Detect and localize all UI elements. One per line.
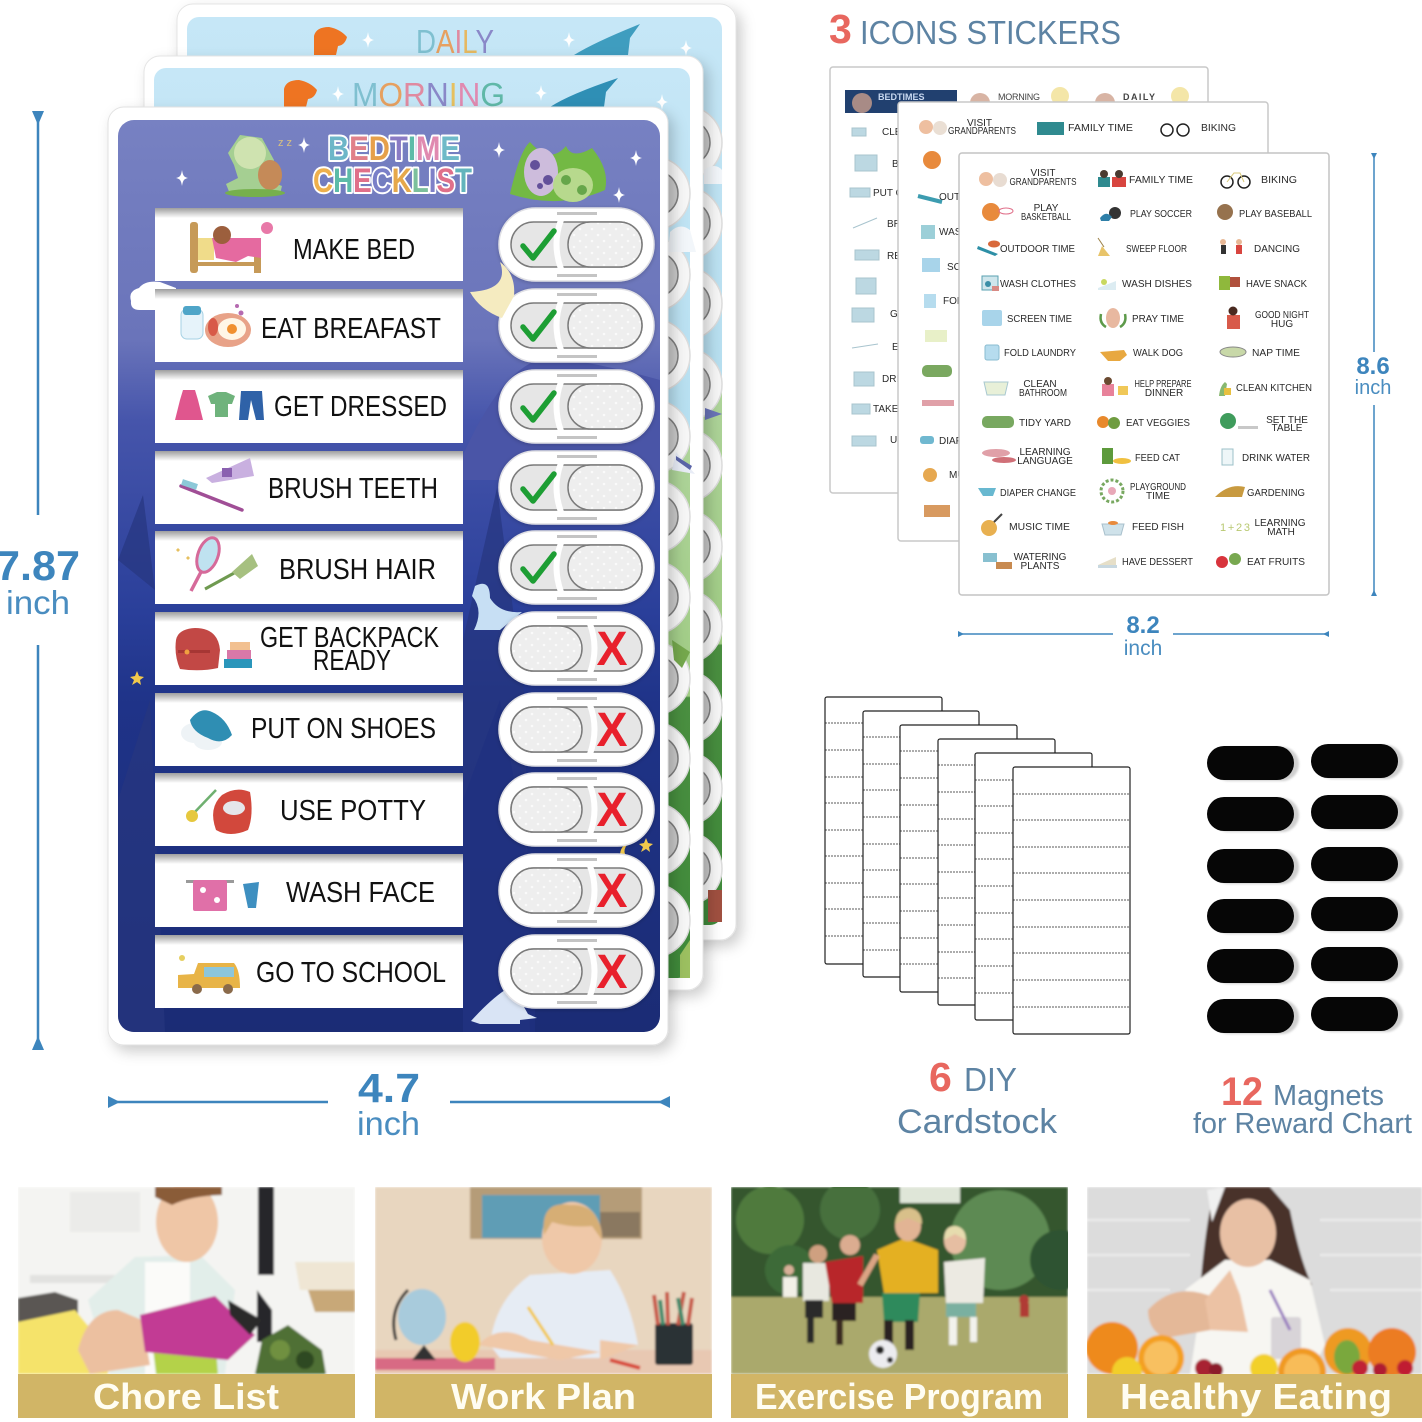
heading: 3 icons stickers: [829, 6, 1121, 52]
sticker: sweep floor: [1098, 238, 1187, 256]
toggle: checked 2: [499, 289, 654, 362]
sticker: set the table: TABLE: [1272, 423, 1303, 434]
sticker: play soccer: PLAY SOCCER: [1130, 209, 1192, 220]
sticker: wash clothes: [982, 276, 1076, 291]
dimension: sticker height 8.6 inch: [1355, 153, 1391, 596]
sticker: play basketball: BASKETBALL: [1021, 212, 1071, 223]
photo panel: exercise program: [731, 1180, 1090, 1418]
toggle: checked 1: [499, 208, 654, 281]
sticker: watering plants: WATERING: [1014, 552, 1067, 563]
icon: potty and brush: [186, 790, 252, 834]
sticker: clean bathroom: CLEAN: [1023, 379, 1057, 390]
photo: children playing soccer: [731, 1180, 1090, 1374]
panel: bedtime sticker sheet: BEDTIMES: [878, 92, 925, 102]
sticker: walk dog: [1100, 348, 1183, 361]
sticker: fold laundry: [985, 345, 1076, 360]
sticker: playground time: TIME: [1146, 491, 1170, 502]
sticker: feed fish: [1102, 521, 1184, 535]
panel: daily checklist board: [177, 4, 736, 940]
card 3: [900, 725, 1017, 992]
sticker: nap time: [1220, 347, 1300, 359]
panel: bedtime sticker sheet: USE: [890, 435, 911, 446]
row: backpack: READY: [313, 645, 391, 677]
sticker: learning language: LEARNING: [1019, 447, 1071, 458]
label: 12 magnets for reward chart: [1193, 1070, 1412, 1140]
icon: orange dino: [314, 27, 347, 55]
panel: main sticker sheet: [959, 153, 1329, 595]
sticker: eat fruits: EAT FRUITS: [1247, 557, 1305, 568]
panel: family sticker sheet: SCREEN: [947, 262, 989, 273]
icon: toothbrush and toothpaste: [181, 458, 254, 510]
toggle: checked 5: [499, 531, 654, 604]
sticker: drink water: DRINK WATER: [1242, 453, 1310, 464]
sticker: dancing: [1220, 239, 1300, 255]
icon: sleeping triceratops: [225, 135, 292, 197]
sticker: learning language: LANGUAGE: [1017, 456, 1073, 467]
row: get dressed: GET DRESSED: [274, 391, 447, 423]
label: 12 magnets for reward chart: 12: [1221, 1070, 1263, 1114]
sticker: learning math: LEARNING: [1254, 518, 1306, 529]
sticker: learning math: 1+23: [1220, 522, 1250, 534]
sticker: visit grandparents: [979, 168, 1077, 188]
sticker: biking: BIKING: [1261, 175, 1297, 186]
sticker: good night hug: [1227, 306, 1309, 330]
row: backpack: [155, 612, 463, 685]
sticker: clean kitchen: [1219, 382, 1312, 396]
dimension: width 4.7 inch: inch: [357, 1105, 420, 1142]
icon: dino eggs and leaves: [510, 142, 606, 202]
panel: family sticker sheet: WASH: [939, 227, 969, 238]
sticker: tidy yard: [982, 416, 1071, 429]
sticker: wash clothes: WASH CLOTHES: [1000, 279, 1076, 290]
sticker: fold laundry: FOLD LAUNDRY: [1004, 348, 1076, 359]
sticker: feed cat: [1102, 448, 1180, 464]
card 4: [938, 739, 1055, 1005]
dimension: sticker height 8.6 inch: 8.6: [1356, 353, 1390, 380]
icon: school bus: [178, 955, 240, 994]
dimension: height 7.87 inch: [0, 111, 80, 1050]
row: get dressed: [155, 370, 463, 443]
sticker: eat veggies: [1097, 416, 1190, 429]
dimension: width 4.7 inch: 4.7: [358, 1065, 420, 1111]
sticker: feed cat: FEED CAT: [1135, 453, 1180, 464]
photo panel: chore list: [18, 1182, 355, 1418]
heading: 3 icons stickers: 3: [829, 6, 852, 52]
row: eat breakfast: [155, 289, 463, 362]
panel: family sticker sheet: [898, 102, 1268, 541]
photo panel: work plan: [375, 1187, 712, 1418]
sticker: diaper change: DIAPER CHANGE: [1000, 488, 1076, 499]
icon: sleeping triceratops: z z: [278, 137, 292, 149]
icon: blue pterosaur: [574, 24, 640, 55]
sticker: help prepare dinner: DINNER: [1145, 388, 1183, 399]
sticker: screen time: SCREEN TIME: [1007, 314, 1072, 325]
card 6: [1013, 767, 1130, 1034]
sticker: eat veggies: EAT VEGGIES: [1126, 418, 1190, 429]
card 5: [975, 753, 1092, 1020]
card 1: [825, 697, 942, 964]
row: eat breakfast: EAT BREAFAST: [261, 313, 441, 345]
sticker: learning math: MATH: [1267, 527, 1295, 538]
label: 6 diy cardstock: [897, 1054, 1058, 1141]
toggle: checked 3: [499, 370, 654, 443]
sticker: visit grandparents: VISIT: [1030, 168, 1056, 179]
icon: mirror and comb: [176, 535, 258, 591]
panel: family sticker sheet: OUTDOOR: [939, 192, 990, 203]
heading: 3 icons stickers: ICONS STICKERS: [860, 14, 1121, 51]
decoration: crescent moon: [470, 262, 514, 318]
sticker: screen time: [982, 310, 1072, 326]
card 2: [863, 711, 979, 977]
sticker: eat fruits: [1216, 553, 1305, 568]
panel: bedtime sticker sheet: GO: [890, 309, 906, 320]
dimension: sticker width 8.2 inch: inch: [1124, 637, 1162, 660]
sticker: watering plants: [983, 552, 1067, 572]
label: 6 diy cardstock: Cardstock: [897, 1103, 1058, 1141]
sticker: clean kitchen: CLEAN KITCHEN: [1236, 383, 1312, 394]
photo: girl with fruit: [1087, 1187, 1422, 1374]
sticker: pray time: PRAY TIME: [1132, 314, 1184, 325]
sticker: help prepare dinner: [1102, 377, 1192, 399]
label: 12 magnets for reward chart: Magnets: [1273, 1080, 1384, 1112]
panel: bedtime sticker sheet: READ: [887, 251, 915, 262]
sticker: have snack: [1219, 276, 1307, 290]
panel: family sticker sheet: BIKING: [1201, 123, 1236, 134]
sticker: good night hug: GOOD NIGHT: [1255, 310, 1309, 321]
sticker: watering plants: PLANTS: [1021, 561, 1060, 572]
sticker: drink water: [1222, 449, 1310, 465]
caption band: work plan: [375, 1374, 712, 1418]
sticker: gardening: GARDENING: [1247, 488, 1305, 499]
panel: family sticker sheet: MUSIC: [949, 470, 981, 481]
decoration: cloud: [130, 282, 176, 310]
row: put on shoes: [155, 693, 463, 766]
panel: cardstock stack: [825, 697, 1130, 1034]
icon: shoes: [181, 710, 232, 750]
icon: blue pterosaur: [550, 78, 618, 107]
panel: black magnets: [1207, 744, 1403, 1034]
sticker: set the table: [1220, 413, 1308, 434]
sticker: music time: MUSIC TIME: [1009, 522, 1070, 533]
dimension: sticker height 8.6 inch: inch: [1355, 377, 1391, 399]
sticker: dancing: DANCING: [1254, 244, 1300, 255]
sticker: outdoor time: [977, 240, 1075, 256]
icon: backpack and books: [176, 628, 252, 670]
caption band: work plan: Work Plan: [451, 1376, 636, 1417]
panel: bedtime sticker sheet: TAKE: [873, 404, 899, 415]
icon: orange dino: [284, 80, 317, 107]
sticker: clean bathroom: BATHROOM: [1019, 388, 1067, 399]
dimension: width 4.7 inch: [108, 1065, 670, 1142]
sticker: gardening: [1215, 486, 1305, 499]
sticker: walk dog: WALK DOG: [1133, 348, 1183, 359]
sticker: tidy yard: TIDY YARD: [1019, 418, 1071, 429]
heading: bedtime checklist: BEDTIME: [328, 130, 460, 168]
dimension: sticker width 8.2 inch: 8.2: [1126, 612, 1160, 639]
panel: bedtime sticker sheet: DAILY: [1123, 92, 1155, 102]
panel: bedtime sticker sheet: DRINK: [882, 374, 913, 385]
row: brush teeth: BRUSH TEETH: [268, 473, 438, 505]
sticker: learning math: [1220, 518, 1306, 538]
row: backpack: GET BACKPACK: [260, 622, 440, 654]
decoration: moon and star: [620, 838, 653, 862]
row: make bed: [155, 208, 463, 281]
panel: bedtime sticker sheet: BATH: [892, 159, 918, 170]
panel: bedtime sticker sheet: [830, 67, 1208, 493]
sticker: play basketball: PLAY: [1034, 203, 1059, 214]
row: wash face: [155, 854, 463, 927]
photo: boy studying: [375, 1187, 712, 1374]
sticker: wash dishes: WASH DISHES: [1122, 279, 1192, 290]
decoration: stegosaurus: [471, 990, 537, 1024]
toggle: checked 4: [499, 451, 654, 524]
row: use potty: USE POTTY: [280, 795, 426, 827]
label: 6 diy cardstock: DIY: [964, 1061, 1017, 1098]
sticker: outdoor time: OUTDOOR TIME: [1000, 244, 1075, 255]
sticker: play baseball: [1217, 204, 1312, 220]
caption band: exercise program: Exercise Program: [755, 1376, 1043, 1417]
panel: family sticker sheet: GRANDPARENTS: [948, 126, 1016, 137]
sticker: good night hug: HUG: [1271, 319, 1293, 330]
caption band: healthy eating: Healthy Eating: [1120, 1376, 1392, 1417]
caption band: chore list: [18, 1374, 355, 1418]
sticker: play basketball: [982, 203, 1071, 223]
sparkles: [176, 137, 642, 203]
sticker: nap time: NAP TIME: [1252, 348, 1300, 359]
panel: morning checklist board: [144, 56, 703, 990]
panel: bedtime sticker sheet: E: [892, 342, 899, 353]
row: make bed: MAKE BED: [293, 234, 415, 266]
row: go to school: GO TO SCHOOL: [256, 957, 446, 989]
panel: bedtime sticker sheet: PUT ON: [873, 188, 911, 199]
sticker: clean bathroom: [984, 379, 1067, 399]
decoration: star: [130, 671, 144, 685]
sticker: sweep floor: SWEEP FLOOR: [1126, 244, 1187, 255]
sticker: learning language: [982, 447, 1073, 467]
panel: family sticker sheet: FOLD: [943, 296, 970, 307]
icon: clothes: [175, 390, 264, 420]
heading: bedtime checklist: [313, 130, 472, 200]
photo panel: healthy eating: [1086, 1187, 1422, 1418]
sticker: visit grandparents: GRANDPARENTS: [1010, 177, 1077, 188]
panel: bedtime checklist board: [108, 107, 668, 1045]
sticker: playground time: PLAYGROUND: [1130, 482, 1186, 493]
heading: morning: MORNING: [352, 76, 505, 113]
panel: family sticker sheet: FAMILY TIME: [1068, 123, 1133, 134]
sticker: family time: FAMILY TIME: [1129, 175, 1193, 186]
sticker: have dessert: HAVE DESSERT: [1122, 557, 1193, 568]
sticker: family time: [1098, 170, 1193, 187]
panel: family sticker sheet: DIAPER: [939, 436, 976, 447]
row: go to school: [155, 935, 463, 1008]
sticker: music time: [981, 514, 1070, 536]
row: brush teeth: [155, 451, 463, 524]
toggle: not done 5: [499, 935, 654, 1008]
row: brush hair: [155, 531, 463, 604]
panel: bedtime sticker sheet: MORNING: [998, 92, 1040, 102]
decoration: long-neck dino: [472, 584, 522, 630]
dimension: height 7.87 inch: inch: [6, 584, 70, 621]
sticker: have snack: HAVE SNACK: [1246, 279, 1307, 290]
sticker: feed fish: FEED FISH: [1132, 522, 1184, 533]
row: put on shoes: PUT ON SHOES: [251, 713, 436, 745]
toggle: not done 3: [499, 773, 654, 846]
icon: towel and tube: [186, 880, 259, 911]
toggle: not done 1: [499, 612, 654, 685]
label: 6 diy cardstock: 6: [929, 1054, 952, 1100]
heading: daily: DAILY: [416, 23, 494, 60]
sticker: play baseball: PLAY BASEBALL: [1239, 209, 1312, 220]
sticker: help prepare dinner: HELP PREPARE: [1134, 379, 1192, 390]
dimension: sticker width 8.2 inch: [958, 612, 1329, 660]
panel: family sticker sheet: VISIT: [967, 118, 992, 129]
heading: bedtime checklist: CHECKLIST: [313, 162, 472, 200]
sticker: set the table: SET THE: [1266, 415, 1308, 426]
caption band: chore list: Chore List: [93, 1376, 279, 1417]
photo: boy cleaning: [18, 1182, 355, 1374]
row: brush hair: BRUSH HAIR: [279, 554, 436, 586]
row: wash face: WASH FACE: [286, 877, 435, 909]
caption band: healthy eating: [1087, 1374, 1422, 1418]
label: 12 magnets for reward chart: for Reward Chart: [1193, 1108, 1412, 1140]
row: use potty: [155, 773, 463, 846]
sticker: pray time: [1101, 308, 1184, 328]
panel: bedtime sticker sheet: CLEAN: [882, 127, 915, 138]
toggle: not done 2: [499, 693, 654, 766]
sticker: biking: [1221, 173, 1297, 188]
toggle: not done 4: [499, 854, 654, 927]
sticker: play soccer: [1100, 207, 1192, 221]
panel: bedtime sticker sheet: BRUSH: [887, 219, 922, 230]
sticker: playground time: [1101, 480, 1186, 502]
icon: milk and eggs: [181, 304, 251, 347]
icon: bed: [190, 222, 273, 273]
